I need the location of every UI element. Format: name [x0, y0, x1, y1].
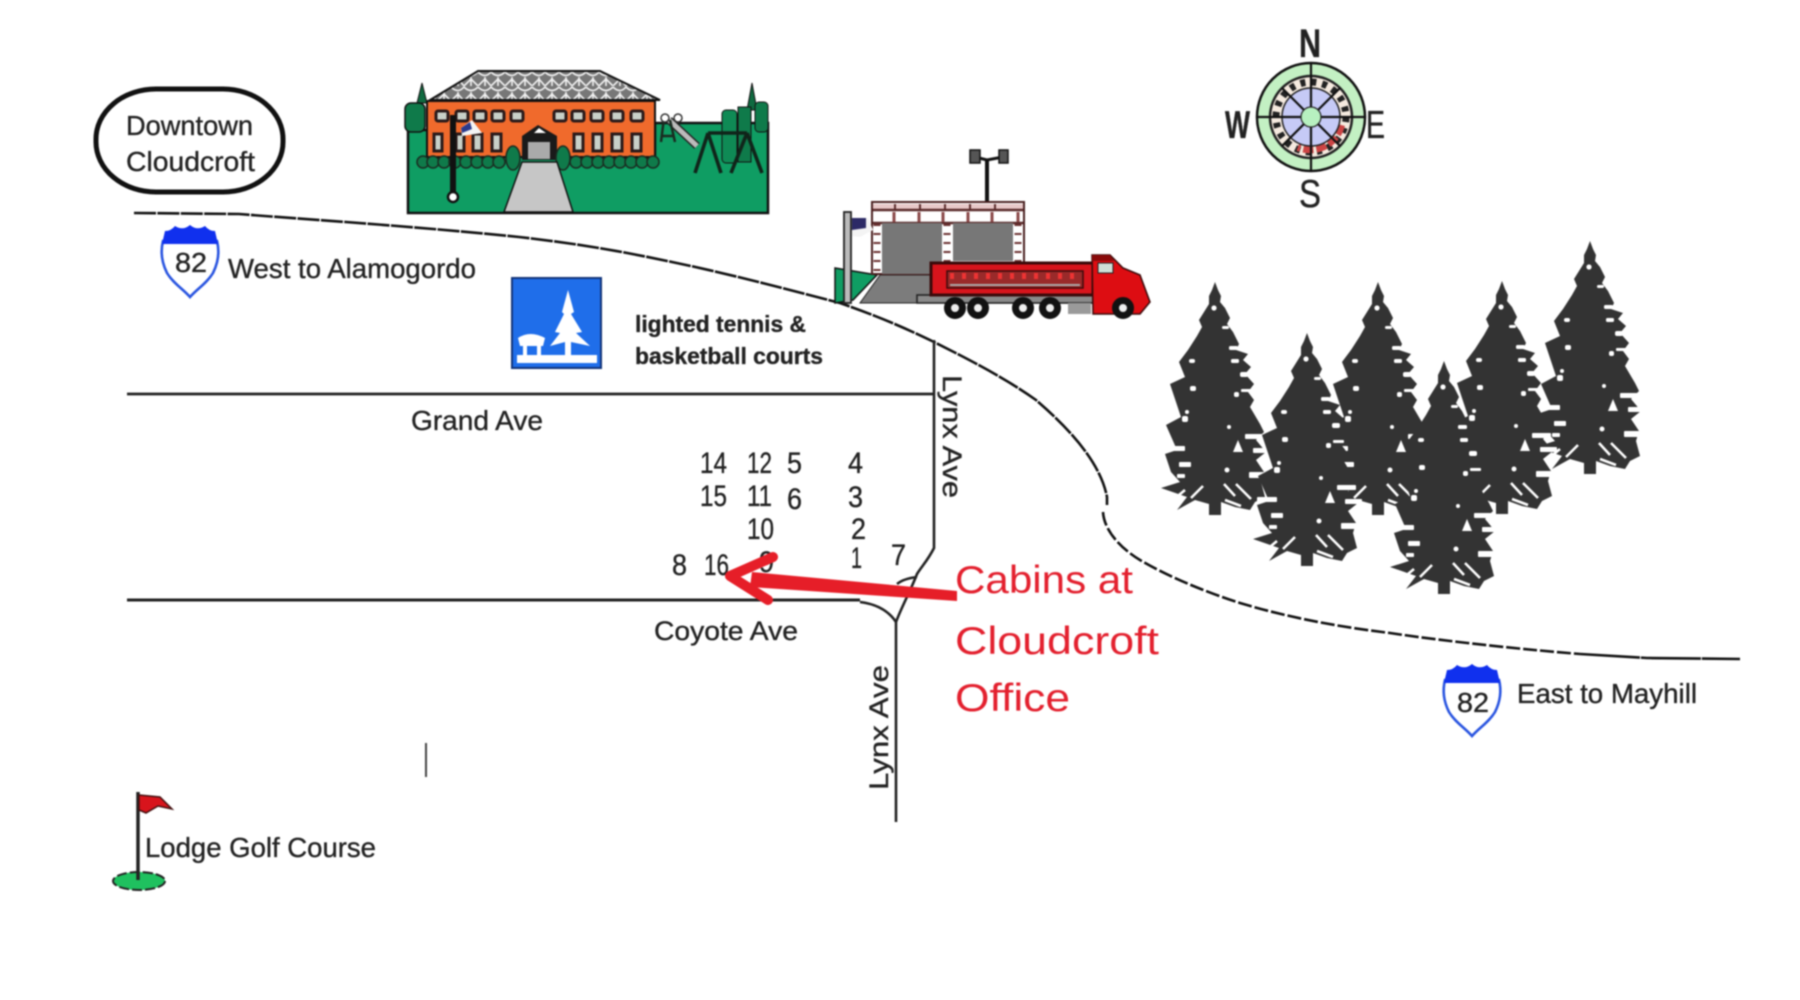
compass letters: S: [1299, 173, 1321, 216]
icon: highway 82 west shield: 82: [175, 247, 207, 278]
arrow to cabins office: [730, 557, 957, 601]
downtown Cloudcroft oval label: [96, 89, 283, 192]
icon: golf flag: [113, 792, 172, 890]
cabin numbers: 16: [704, 549, 729, 582]
icon: pine forest: [1161, 241, 1645, 594]
icon: compass rose: [1225, 22, 1385, 216]
cabin numbers: 5: [787, 447, 802, 480]
label: lighted tennis and basketball courts: [635, 311, 823, 369]
compass letters: W: [1225, 104, 1250, 147]
road: Grand Ave: [127, 393, 934, 395]
downtown Cloudcroft oval label: Cloudcroft: [126, 146, 255, 177]
cabin numbers: 12: [747, 447, 772, 480]
cabin numbers: 8: [672, 549, 687, 582]
small tick mark: [425, 743, 427, 777]
cabin numbers: [672, 447, 906, 582]
label: Lodge Golf Course: Lodge Golf Course: [145, 832, 376, 863]
label: Lynx Ave south: Lynx Ave: [864, 665, 894, 790]
cabin numbers: 15: [700, 480, 727, 513]
compass letters: N: [1299, 22, 1321, 66]
cabin numbers: 2: [851, 513, 866, 546]
cabin numbers: 7: [891, 539, 906, 572]
icon: tree park sign: [512, 278, 601, 368]
icon: highway 82 west shield: [162, 225, 218, 297]
downtown Cloudcroft oval label: Downtown: [126, 110, 253, 141]
label: lighted tennis and basketball courts: lighted tennis &: [635, 311, 806, 337]
cabin numbers: 3: [848, 481, 863, 514]
cabin numbers: 11: [747, 480, 772, 513]
cabin numbers: 10: [747, 513, 774, 546]
icon: fire station with truck: [835, 150, 1150, 316]
compass letters: [1225, 22, 1385, 216]
cabin numbers: 4: [848, 447, 863, 480]
compass letters: E: [1366, 104, 1385, 147]
cabin numbers: 14: [700, 447, 727, 480]
icon: highway 82 east shield: [1444, 664, 1500, 736]
road: Coyote Ave: [127, 598, 860, 602]
label: Lynx Ave north: Lynx Ave: [937, 375, 967, 498]
callout: Cabins at Cloudcroft Office: Office: [955, 677, 1070, 720]
label: West to Alamogordo: West to Alamogordo: [228, 253, 476, 284]
label: Grand Ave: Grand Ave: [411, 405, 543, 436]
icon: highway 82 east shield: 82: [1457, 687, 1489, 718]
cabin numbers: 9: [759, 546, 774, 579]
callout: Cabins at Cloudcroft Office: Cabins at: [955, 559, 1133, 602]
callout: Cabins at Cloudcroft Office: Cloudcroft: [955, 620, 1159, 663]
callout: Cabins at Cloudcroft Office: [955, 559, 1159, 720]
cabin numbers: 6: [787, 483, 802, 516]
label: East to Mayhill: East to Mayhill: [1517, 678, 1697, 709]
road: Lynx Ave with junction: [860, 340, 934, 822]
label: Coyote Ave: Coyote Ave: [654, 616, 798, 646]
icon: school building: [405, 71, 768, 213]
cabin numbers: 1: [851, 542, 862, 575]
road: highway 82: [134, 213, 1740, 659]
label: lighted tennis and basketball courts: basketball courts: [635, 343, 823, 369]
